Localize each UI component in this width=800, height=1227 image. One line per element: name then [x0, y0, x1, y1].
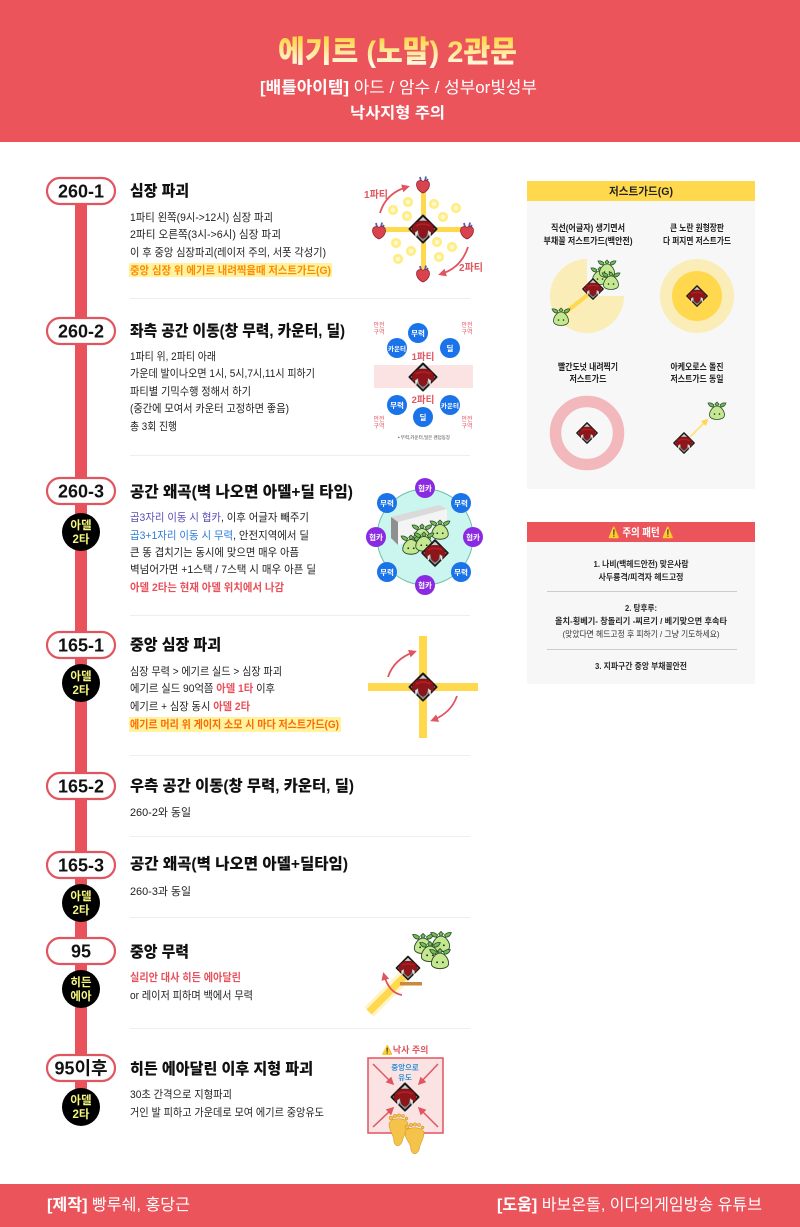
adrenaline badge	[62, 884, 100, 922]
description: or 레이저 피하며 백에서 무력	[130, 988, 253, 1002]
phase pill 165-1: 165-1	[58, 636, 104, 656]
diagram: party positions: 무력	[390, 400, 404, 410]
caution 1: 사두룡격/피격자 헤드고정	[598, 572, 684, 582]
diagram: terrain break: 중앙으로	[391, 1062, 419, 1072]
section 95	[47, 932, 451, 1012]
description: 실리안 대사 히든 에아달린	[130, 970, 241, 984]
description: 에기르 머리 위 게이지 소모 시 마다 저스트가드(G)	[130, 717, 339, 731]
caution 2: 올치-횡베기- 창돌리기 -찌르기 / 베기맞으면 후속타	[555, 616, 727, 626]
header banner	[0, 0, 800, 142]
description: 에기르 + 심장 동시 아델 2타	[130, 699, 250, 713]
description: 260-3과 동일	[130, 884, 191, 898]
guard: charge: 아케오로스 돌진	[670, 361, 724, 372]
hidden awakening badge: 에아	[70, 990, 92, 1003]
description: 거인 발 피하고 가운데로 모여 에기르 중앙유도	[130, 1105, 324, 1119]
guard: red donut	[556, 361, 618, 464]
diagram: terrain break: 유도	[398, 1073, 412, 1082]
phase pill 165-2	[47, 773, 115, 799]
diagram: heart break: 1파티	[364, 189, 388, 201]
caution 2	[555, 603, 727, 639]
description: 260-2와 동일	[130, 805, 191, 819]
adrenaline badge	[62, 664, 100, 702]
adrenaline badge: 2타	[73, 684, 90, 697]
adrenaline badge: 아델	[70, 669, 92, 683]
phase pill 95: 95	[71, 942, 91, 962]
description: 2파티 오른쪽(3시->6시) 심장 파괴	[130, 228, 281, 241]
description: 곱3+1자리 이동 시 무력, 안전지역에서 딜	[130, 529, 309, 542]
phase pill 260-2: 260-2	[58, 322, 104, 342]
diagram: heart break: 2파티	[459, 262, 483, 274]
heading: 공간 왜곡(벽 나오면 아델+딜타임)	[130, 855, 348, 873]
adrenaline badge	[62, 513, 100, 551]
guard: charge	[670, 361, 726, 453]
phase pill 260-1	[47, 178, 115, 204]
diagram: space distortion: 무력	[380, 498, 394, 508]
description: 곱3자리 이동 시 협카, 이후 어글자 빼주기	[130, 511, 309, 524]
diagram: party positions: 구역	[461, 422, 473, 430]
diagram: space distortion: 협카	[466, 532, 480, 542]
adrenaline badge: 2타	[73, 1108, 90, 1121]
heading: 심장 파괴	[130, 182, 189, 200]
caution 2: 2. 탕후루:	[625, 603, 657, 613]
panel header: 저스트가드(G)	[609, 184, 673, 198]
section 165-3	[47, 852, 348, 922]
heading: 중앙 심장 파괴	[130, 636, 221, 654]
diagram: center heart	[368, 636, 478, 738]
diagram: party positions: 구역	[373, 422, 385, 430]
section 95 이후	[47, 1044, 443, 1154]
adrenaline badge: 2타	[73, 533, 90, 546]
diagram: party positions: 구역	[373, 328, 385, 336]
guard: yellow circle: 다 퍼지면 저스트가드	[663, 235, 731, 246]
diagram: space distortion: 무력	[380, 567, 394, 577]
description: 심장 무력 > 에기르 실드 > 심장 파괴	[130, 665, 282, 678]
hidden awakening badge	[62, 970, 100, 1008]
panel: caution patterns	[527, 522, 755, 684]
phase pill 165-3: 165-3	[58, 856, 104, 876]
panel: just guard	[527, 181, 755, 489]
timeline bar	[75, 190, 87, 1105]
description: 에기르 실드 90억쯤 아델 1타 이후	[130, 681, 275, 695]
guard: red donut: 저스트가드	[570, 373, 606, 384]
battle items line: [배틀아이템] 아드 / 암수 / 성부or빛성부	[260, 78, 537, 97]
phase pill 260-1: 260-1	[58, 182, 104, 202]
diagram: space distortion: 협카	[418, 483, 432, 493]
panel header	[527, 522, 755, 542]
diagram: party positions: 안전	[461, 415, 473, 423]
adrenaline badge: 아델	[70, 889, 92, 903]
section 165-1	[47, 632, 478, 738]
diagram: party positions: 카운터	[441, 401, 459, 410]
description	[130, 350, 315, 433]
section 260-2	[47, 318, 473, 441]
description: 총 3회 진행	[130, 420, 177, 433]
diagram: heart break	[364, 176, 483, 282]
hidden awakening badge: 히든	[70, 976, 92, 989]
description: 1파티 왼쪽(9시->12시) 심장 파괴	[130, 210, 273, 224]
phase pill 165-1	[47, 632, 115, 658]
guard: red donut: 빨간도넛 내려찍기	[558, 361, 618, 372]
diagram: party positions: 1파티	[412, 352, 434, 363]
caution 3: 3. 지파구간 중앙 부채꼴안전	[595, 661, 687, 671]
description: 파티별 기믹수행 정해서 하기	[130, 384, 251, 398]
description: 이 후 중앙 심장파괴(레이저 주의, 서폿 각성기)	[130, 246, 326, 259]
warning line: 낙사지형 주의	[350, 104, 445, 122]
description: (중간에 모여서 카운터 고정하면 좋음)	[130, 401, 289, 415]
description: 가운데 발이나오면 1시, 5시,7시,11시 피하기	[130, 366, 315, 380]
panel header: ⚠️ 주의 패턴 ⚠️	[608, 525, 674, 539]
section 260-1	[47, 176, 483, 282]
heading: 좌측 공간 이동(창 무력, 카운터, 딜)	[130, 321, 345, 340]
diagram: party positions: 2파티	[412, 395, 434, 406]
phase pill 260-3: 260-3	[58, 482, 104, 502]
adrenaline badge: 아델	[70, 518, 92, 532]
diagram: party positions: 카운터	[388, 344, 406, 353]
phase pill 165-3	[47, 852, 115, 878]
diagram: party positions: 안전	[373, 415, 385, 423]
credit right: [도움] 바보온돌, 이다의게임방송 유튜브	[497, 1196, 762, 1214]
phase pill 95 이후	[47, 1055, 115, 1081]
heading: 히든 에아달린 이후 지형 파괴	[130, 1059, 313, 1078]
diagram: party positions: • 무력,카운터,딜은 랜덤동장	[398, 434, 450, 441]
section 165-2	[47, 773, 354, 819]
diagram: party positions: 구역	[461, 328, 473, 336]
adrenaline badge: 아델	[70, 1093, 92, 1107]
heading: 공간 왜곡(벽 나오면 아델+딜 타임)	[130, 483, 353, 501]
phase pill 260-3	[47, 478, 115, 504]
guard: charge: 저스트가드 동일	[670, 373, 724, 384]
diagram: space distortion: 무력	[454, 567, 468, 577]
caution 2: (맞았다면 헤드고정 후 피하기 / 그냥 기도하세요)	[562, 629, 720, 639]
phase pill 260-2	[47, 318, 115, 344]
description: 1파티 위, 2파티 아래	[130, 350, 216, 363]
guard: yellow circle	[660, 222, 734, 333]
description: 큰 똥 겹치기는 동시에 맞으면 매우 아픔	[130, 546, 299, 559]
diagram: terrain break	[368, 1044, 443, 1154]
diagram: party positions: 딜	[420, 412, 427, 422]
diagram: center stagger	[369, 932, 451, 1012]
title: 에기르 (노말) 2관문	[278, 36, 517, 69]
diagram: party positions: 무력	[411, 328, 425, 338]
description: 중앙 심장 위 에기르 내려찍을때 저스트가드(G)	[130, 263, 331, 277]
description	[129, 210, 332, 277]
diagram: space distortion: 협카	[369, 532, 383, 542]
credit left: [제작] 빵루쉐, 홍당근	[47, 1196, 190, 1214]
adrenaline badge: 2타	[73, 904, 90, 917]
guard: sector: 직선(어글자) 생기면서	[551, 222, 625, 233]
section 260-3	[47, 478, 483, 595]
diagram: party positions	[373, 321, 473, 441]
panel header	[527, 181, 755, 201]
guard: yellow circle: 큰 노란 원형장판	[670, 222, 725, 233]
phase pill 95	[47, 938, 115, 964]
description	[130, 1088, 324, 1119]
diagram: space distortion: 협카	[418, 580, 432, 590]
diagram: party positions: 딜	[447, 343, 454, 353]
description	[129, 665, 341, 732]
heading: 우측 공간 이동(창 무력, 카운터, 딜)	[130, 776, 354, 795]
phase pill 95 이후: 95이후	[54, 1058, 108, 1078]
diagram: space distortion: 무력	[454, 498, 468, 508]
caution 1	[594, 559, 689, 582]
description: 30초 간격으로 지형파괴	[130, 1088, 232, 1101]
footer	[0, 1184, 800, 1227]
description: 아델 2타는 현재 아델 위치에서 나감	[130, 580, 284, 594]
guard: sector	[544, 222, 633, 333]
heading: 중앙 무력	[130, 943, 189, 961]
guard: sector: 부채꼴 저스트가드(백안전)	[544, 235, 633, 246]
description	[130, 970, 253, 1002]
diagram: party positions: 안전	[373, 321, 385, 329]
diagram: party positions: 안전	[461, 321, 473, 329]
adrenaline badge	[62, 1088, 100, 1126]
diagram: space distortion	[366, 478, 483, 595]
description: 벽넘어가면 +1스택 / 7스택 시 매우 아픈 딜	[130, 563, 316, 576]
phase pill 165-2: 165-2	[58, 776, 104, 796]
caution 1: 1. 나비(백헤드안전) 맞은사람	[594, 559, 689, 569]
description	[130, 511, 316, 594]
diagram: terrain break: ⚠️낙사 주의	[382, 1044, 428, 1055]
